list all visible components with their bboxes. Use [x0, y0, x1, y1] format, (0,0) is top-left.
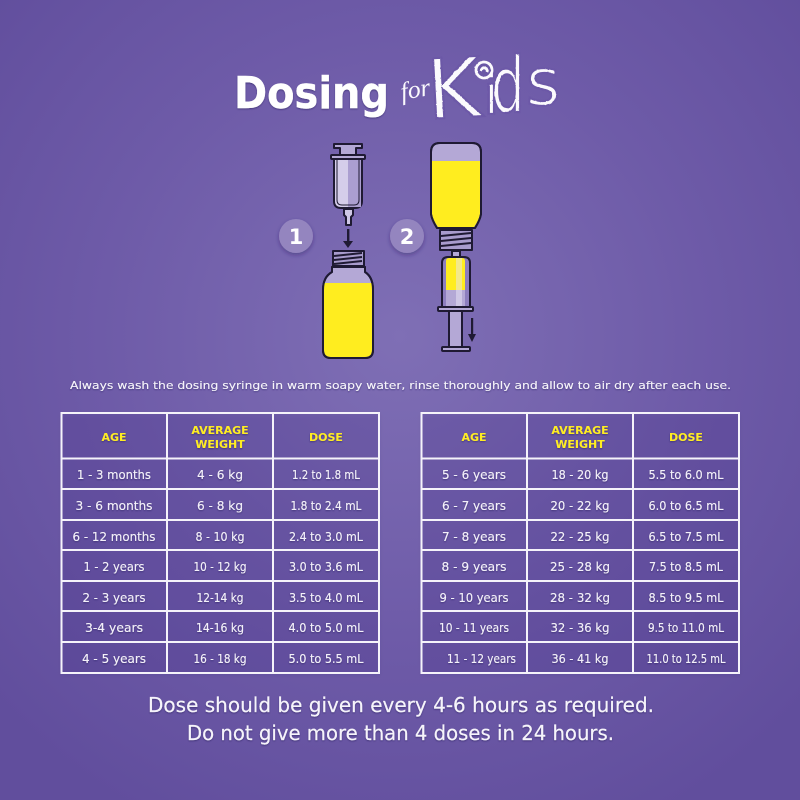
- table rows: 3.0 to 3.6 mL: [289, 560, 363, 574]
- table rows: 6.5 to 7.5 mL: [648, 530, 724, 544]
- table rows: 8.5 to 9.5 mL: [648, 591, 724, 605]
- table rows: 4 - 6 kg: [197, 468, 243, 482]
- table: ages 5 to 12 years: [422, 413, 740, 673]
- table rows: 6 - 12 months: [72, 530, 156, 544]
- table rows: 4.0 to 5.0 mL: [288, 621, 364, 635]
- table rows: 18 - 20 kg: [552, 468, 608, 482]
- table rows: 9 - 10 years: [440, 591, 508, 605]
- table rows: 3 - 6 months: [76, 499, 152, 513]
- table rows: [72, 468, 364, 666]
- title word: Kids: K: [424, 39, 486, 139]
- instruction text: Always wash the dosing syringe in warm soapy water, rinse thoroughly and allow to air dry after each use.: [70, 379, 731, 392]
- icon: bottle with yellow liquid: [323, 251, 373, 358]
- table rows: 12-14 kg: [196, 591, 244, 605]
- table rows: 8 - 9 years: [442, 560, 506, 574]
- table rows: 32 - 36 kg: [550, 621, 610, 635]
- table rows: 9.5 to 11.0 mL: [648, 621, 724, 635]
- table rows: 16 - 18 kg: [194, 652, 246, 666]
- table rows: 22 - 25 kg: [550, 530, 610, 544]
- table rows: 1.8 to 2.4 mL: [290, 499, 362, 513]
- table header: DOSE: [669, 431, 703, 444]
- icon: swirl dot of the i: [476, 62, 492, 78]
- title word: for: for: [398, 74, 433, 106]
- table header: WEIGHT: [555, 438, 605, 451]
- footer note: Do not give more than 4 doses in 24 hours.: [187, 721, 614, 745]
- table rows: 14-16 kg: [196, 621, 244, 635]
- table rows: 4 - 5 years: [82, 652, 146, 666]
- table rows: 36 - 41 kg: [552, 652, 608, 666]
- icon: inverted bottle: [431, 143, 481, 257]
- table rows: 2.4 to 3.0 mL: [289, 530, 363, 544]
- table rows: 7 - 8 years: [442, 530, 506, 544]
- table rows: 1.2 to 1.8 mL: [292, 468, 360, 482]
- title word: Dosing: Dosing: [234, 68, 389, 119]
- title word: Kids: [424, 39, 560, 139]
- table rows: 1 - 3 months: [77, 468, 151, 482]
- table rows: [439, 468, 726, 666]
- table header: AGE: [101, 431, 127, 444]
- arrow: into bottle: [343, 229, 353, 248]
- footer note: Dose should be given every 4-6 hours as required.: [148, 693, 654, 717]
- table rows: 6 - 7 years: [442, 499, 506, 513]
- table rows: 6 - 8 kg: [197, 499, 243, 513]
- table rows: 28 - 32 kg: [550, 591, 610, 605]
- table rows: 7.5 to 8.5 mL: [649, 560, 723, 574]
- step 2 badge: [390, 219, 424, 253]
- table rows: 3.5 to 4.0 mL: [289, 591, 363, 605]
- table header: AGE: [461, 431, 487, 444]
- table rows: 5 - 6 years: [442, 468, 506, 482]
- arrow: plunger down: [468, 318, 476, 342]
- table rows: 3-4 years: [85, 621, 143, 635]
- title word: Kids: i: [483, 63, 500, 127]
- table rows: 11 - 12 years: [447, 652, 516, 666]
- table header: [101, 424, 343, 451]
- step 2 badge: 2: [400, 225, 414, 249]
- table rows: 5.0 to 5.5 mL: [288, 652, 364, 666]
- footer note: [148, 693, 654, 745]
- table header: DOSE: [309, 431, 343, 444]
- step 1 badge: 1: [289, 225, 303, 249]
- table rows: 5.5 to 6.0 mL: [648, 468, 724, 482]
- step 1 badge: [279, 219, 313, 253]
- table rows: 8 - 10 kg: [196, 530, 244, 544]
- icon: syringe: [331, 144, 365, 225]
- table rows: 2 - 3 years: [82, 591, 146, 605]
- table rows: 10 - 12 kg: [194, 560, 246, 574]
- title word: Kids: d: [491, 39, 525, 131]
- icon: filling syringe: [438, 257, 473, 351]
- title word: Kids: s: [526, 44, 560, 121]
- table rows: 6.0 to 6.5 mL: [648, 499, 724, 513]
- table header: [461, 424, 703, 451]
- table header: AVERAGE: [551, 424, 609, 437]
- table: ages 1 month to 5 years: [62, 413, 380, 673]
- table rows: 11.0 to 12.5 mL: [646, 652, 726, 666]
- table rows: 20 - 22 kg: [550, 499, 610, 513]
- title: [234, 39, 560, 139]
- table header: AVERAGE: [191, 424, 249, 437]
- table header: WEIGHT: [195, 438, 245, 451]
- table rows: 25 - 28 kg: [550, 560, 610, 574]
- table rows: 10 - 11 years: [439, 621, 509, 635]
- table rows: 1 - 2 years: [84, 560, 144, 574]
